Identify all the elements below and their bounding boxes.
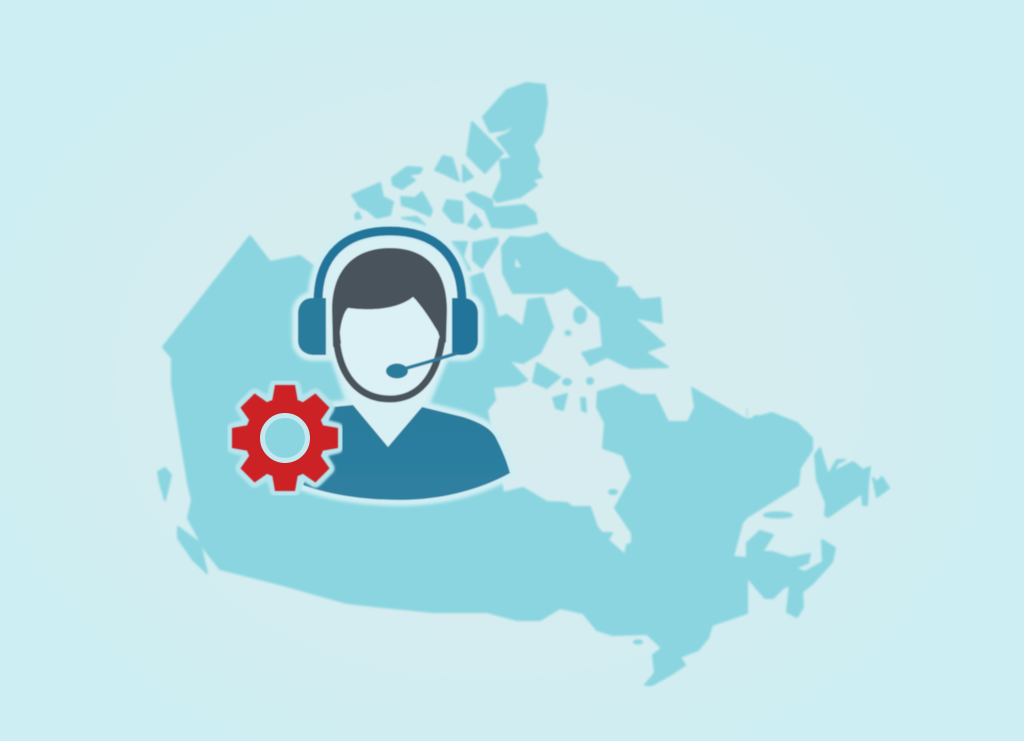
microphone xyxy=(386,353,458,378)
Vancouver Island xyxy=(178,527,207,573)
neck and face area xyxy=(322,238,458,447)
Maritimes xyxy=(747,531,835,617)
shoulders xyxy=(303,405,510,500)
Anticosti Island xyxy=(764,512,792,518)
Baffin Island xyxy=(502,233,668,368)
left ear cup xyxy=(298,298,326,355)
microphone head xyxy=(386,364,408,378)
gear halo xyxy=(233,386,337,490)
map of Canada xyxy=(158,83,889,685)
right ear cup xyxy=(452,298,478,355)
gear hole xyxy=(262,416,308,460)
headband xyxy=(318,231,462,302)
support agent xyxy=(298,231,510,500)
Haida Gwaii xyxy=(158,468,171,500)
hair xyxy=(332,248,447,347)
Saint Pierre islet xyxy=(873,477,889,497)
small eastern islets xyxy=(609,408,760,644)
Ellesmere Island xyxy=(483,83,547,202)
Arctic islands xyxy=(352,156,593,412)
gear icon xyxy=(232,385,338,491)
mainland xyxy=(163,236,812,685)
gear body xyxy=(232,385,338,491)
jaw outline xyxy=(337,340,442,399)
agent halo xyxy=(298,231,510,500)
Newfoundland xyxy=(815,448,870,517)
microphone boom xyxy=(400,353,458,370)
Axel Heiberg Island xyxy=(467,122,503,173)
face xyxy=(340,297,438,394)
